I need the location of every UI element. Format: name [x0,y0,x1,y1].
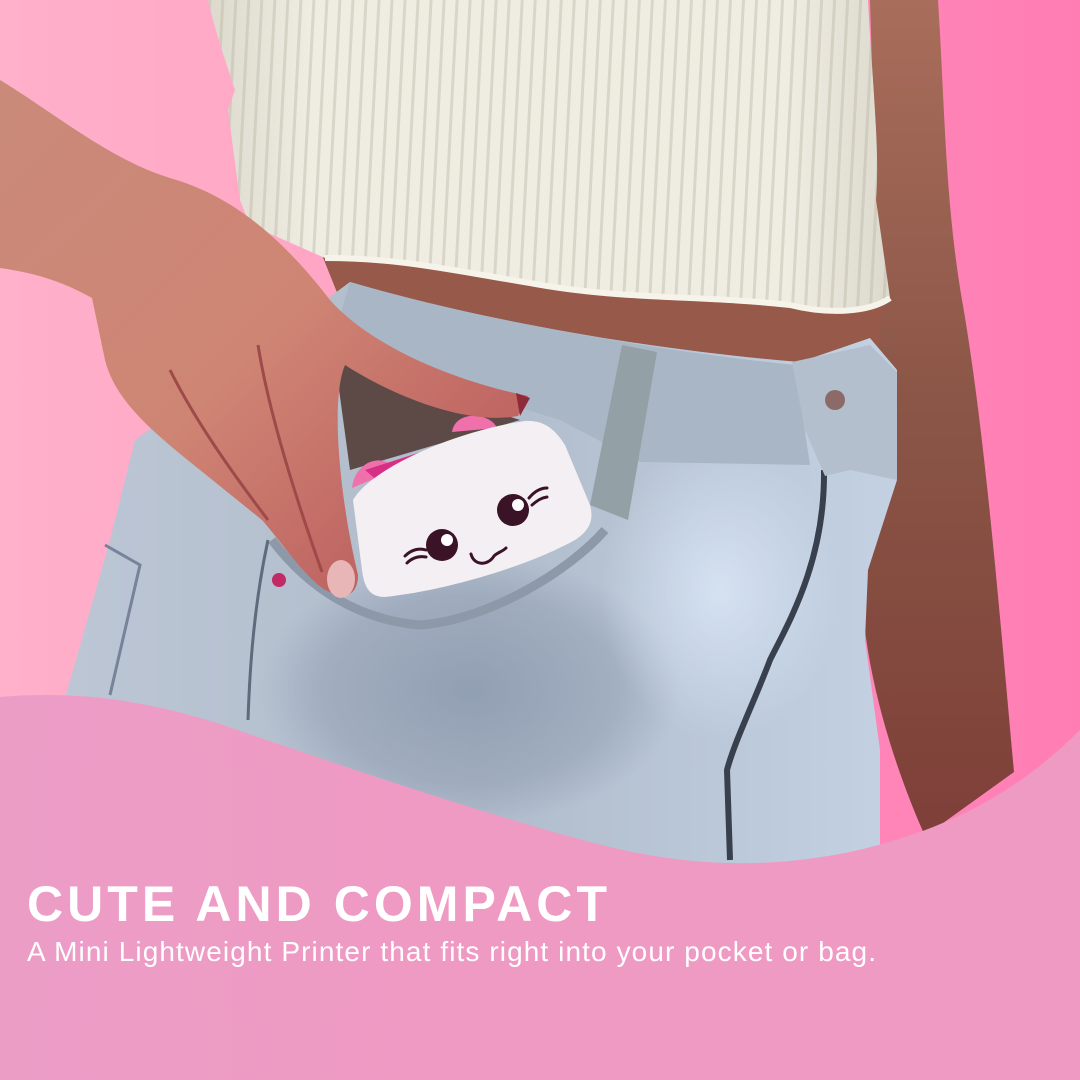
wave panel [0,695,1080,1080]
printer ears [352,416,530,500]
fingers [258,345,322,572]
zipper fly [727,470,824,860]
white ribbed top [208,0,890,311]
nail [327,560,355,598]
rivet [272,573,286,587]
subheading: A Mini Lightweight Printer that fits right into your pocket or bag. [27,936,876,967]
jeans [66,282,897,870]
belt band [330,282,810,465]
pocket seam [272,530,605,625]
belt loop [590,345,657,520]
torso skin [320,0,1014,836]
heading: CUTE AND COMPACT [27,876,607,932]
printer [352,416,591,597]
printer face [405,488,547,563]
hand and forearm [0,80,530,598]
waist button tab [792,345,897,480]
pocket shadow [335,360,520,470]
printer body [353,421,591,597]
